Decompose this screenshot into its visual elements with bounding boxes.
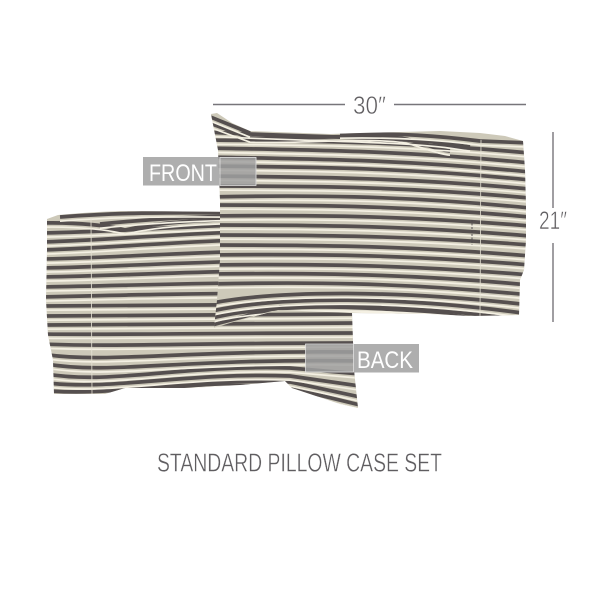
FRONT label: FRONT (149, 160, 217, 187)
title: STANDARD PILLOW CASE SET (157, 450, 442, 478)
back pillow case (40, 205, 365, 415)
FRONT label (143, 157, 256, 187)
BACK label (306, 344, 419, 374)
front pillow case (205, 110, 530, 332)
BACK label: BACK (357, 347, 413, 374)
height dimension: 21 inches: 21″ (539, 207, 567, 235)
width dimension: 30 inches: 30″ (353, 92, 386, 120)
